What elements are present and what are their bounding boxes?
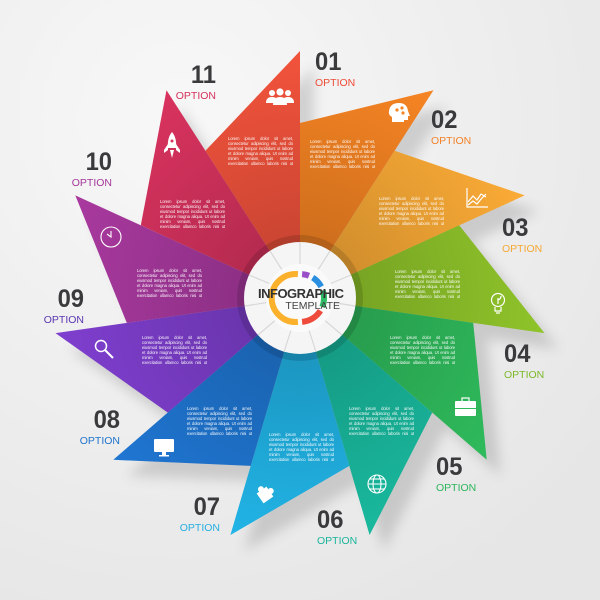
text 02: minim veniam, quis nostrud [310, 159, 375, 164]
label 05: 05 [436, 453, 462, 481]
label 02 [431, 106, 471, 147]
text 11: eiusmod tempor incididunt ut labore [160, 209, 225, 214]
text 07 [269, 432, 334, 462]
text 01: minim veniam, quis nostrud [228, 156, 293, 161]
text 05 [390, 335, 455, 365]
text 09: Lorem ipsum dolor sit amet, [142, 335, 207, 340]
icon: briefcase [455, 398, 476, 416]
text 04: consectetur adipiscing elit, sed do [395, 274, 460, 279]
text 05: eiusmod tempor incididunt ut labore [390, 345, 455, 350]
text 04: Lorem ipsum dolor sit amet, [395, 269, 460, 274]
text 07: consectetur adipiscing elit, sed do [269, 437, 334, 442]
blade 04 [300, 225, 544, 333]
text 01: eiusmod tempor incididunt ut labore [228, 146, 293, 151]
center title: TEMPLATE [285, 300, 340, 312]
text 09: exercitation ullamco laboris nisi ut [142, 360, 207, 365]
label 10: 10 [86, 148, 112, 176]
text 10: minim veniam, quis nostrud [137, 288, 202, 293]
text 05: et dolore magna aliqua. Ut enim ad [390, 350, 455, 355]
text 10: eiusmod tempor incididunt ut labore [137, 278, 202, 283]
text 08: eiusmod tempor incididunt ut labore [187, 416, 252, 421]
donut chart [272, 274, 324, 322]
blade 06 [300, 298, 432, 535]
icon: monitor [154, 439, 174, 456]
text 09: et dolore magna aliqua. Ut enim ad [142, 350, 207, 355]
label 08: 08 [94, 406, 120, 434]
label 07 [180, 493, 220, 534]
label 08 [80, 406, 120, 447]
icon: head [389, 103, 410, 122]
label 05 [436, 453, 476, 494]
label 05: OPTION [436, 482, 476, 494]
label 01: 01 [315, 48, 341, 76]
blade 07 [230, 298, 349, 535]
text 04: exercitation ullamco laboris nisi ut [395, 294, 460, 299]
icon: people [266, 88, 294, 105]
text 05: consectetur adipiscing elit, sed do [390, 340, 455, 345]
text 06: minim veniam, quis nostrud [349, 426, 414, 431]
text 07: minim veniam, quis nostrud [269, 452, 334, 457]
text 02: eiusmod tempor incididunt ut labore [310, 149, 375, 154]
text 08: consectetur adipiscing elit, sed do [187, 411, 252, 416]
label 06 [317, 506, 357, 547]
blade 05 [300, 298, 487, 460]
label 06: 06 [317, 506, 343, 534]
label 02: OPTION [431, 135, 471, 147]
label 06: OPTION [317, 535, 357, 547]
text 05: exercitation ullamco laboris nisi ut [390, 360, 455, 365]
label 11: 11 [191, 61, 216, 89]
text 09: eiusmod tempor incididunt ut labore [142, 345, 207, 350]
text 08: et dolore magna aliqua. Ut enim ad [187, 421, 252, 426]
text 11: minim veniam, quis nostrud [160, 219, 225, 224]
text 10 [137, 268, 202, 298]
text 03: eiusmod tempor incididunt ut labore [379, 206, 444, 211]
label 03 [502, 214, 542, 255]
text 04: minim veniam, quis nostrud [395, 289, 460, 294]
text 09: consectetur adipiscing elit, sed do [142, 340, 207, 345]
text 03: et dolore magna aliqua. Ut enim ad [379, 211, 444, 216]
icon: puzzle [254, 481, 277, 503]
text 09: minim veniam, quis nostrud [142, 355, 207, 360]
text 06: exercitation ullamco laboris nisi ut [349, 431, 414, 436]
blade 10 [75, 195, 300, 323]
text 08: exercitation ullamco laboris nisi ut [187, 431, 252, 436]
icon: magnifier [96, 340, 113, 358]
icon: clock [101, 227, 121, 247]
text 07: eiusmod tempor incididunt ut labore [269, 442, 334, 447]
text 04: eiusmod tempor incididunt ut labore [395, 279, 460, 284]
blade 08 [113, 298, 300, 466]
text 05: minim veniam, quis nostrud [390, 355, 455, 360]
text 08: minim veniam, quis nostrud [187, 426, 252, 431]
text 01: exercitation ullamco laboris nisi ut [228, 161, 293, 166]
label 11 [176, 61, 216, 102]
text 04 [395, 269, 460, 299]
label 09: OPTION [44, 314, 84, 326]
text 10: consectetur adipiscing elit, sed do [137, 273, 202, 278]
text 07: Lorem ipsum dolor sit amet, [269, 432, 334, 437]
label 09: 09 [58, 285, 84, 313]
text 10: exercitation ullamco laboris nisi ut [137, 293, 202, 298]
blade 03 [300, 151, 525, 298]
text 07: et dolore magna aliqua. Ut enim ad [269, 447, 334, 452]
blade 11 [141, 90, 300, 298]
icon: chart [467, 188, 488, 207]
center title [258, 286, 344, 312]
text 08 [187, 406, 252, 436]
text 06: et dolore magna aliqua. Ut enim ad [349, 421, 414, 426]
label 11: OPTION [176, 90, 216, 102]
label 07: OPTION [180, 522, 220, 534]
label 08: OPTION [80, 435, 120, 447]
text 03 [379, 196, 444, 226]
label 03: 03 [502, 214, 528, 242]
label 01: OPTION [315, 77, 355, 89]
icon: globe [368, 475, 386, 493]
text 11: consectetur adipiscing elit, sed do [160, 204, 225, 209]
text 02: consectetur adipiscing elit, sed do [310, 144, 375, 149]
label 01 [315, 48, 355, 89]
icon: bulb [492, 294, 504, 313]
label 04: 04 [504, 340, 530, 368]
center circle [237, 235, 363, 361]
text 11: et dolore magna aliqua. Ut enim ad [160, 214, 225, 219]
label 09 [44, 285, 84, 326]
label 04: OPTION [504, 369, 544, 381]
text 11: exercitation ullamco laboris nisi ut [160, 224, 225, 229]
text 08: Lorem ipsum dolor sit amet, [187, 406, 252, 411]
text 03: consectetur adipiscing elit, sed do [379, 201, 444, 206]
label 07: 07 [194, 493, 220, 521]
text 03: exercitation ullamco laboris nisi ut [379, 221, 444, 226]
label 02: 02 [431, 106, 457, 134]
text 06: eiusmod tempor incididunt ut labore [349, 416, 414, 421]
text 10: et dolore magna aliqua. Ut enim ad [137, 283, 202, 288]
text 01 [228, 136, 293, 166]
label 10: OPTION [72, 177, 112, 189]
icon: rocket [164, 132, 180, 158]
text 06: consectetur adipiscing elit, sed do [349, 411, 414, 416]
text 06 [349, 406, 414, 436]
text 02: Lorem ipsum dolor sit amet, [310, 139, 375, 144]
blade 02 [300, 90, 434, 298]
text 02: exercitation ullamco laboris nisi ut [310, 164, 375, 169]
icons [96, 88, 504, 503]
text 06: Lorem ipsum dolor sit amet, [349, 406, 414, 411]
text 11 [160, 199, 225, 229]
text 01: consectetur adipiscing elit, sed do [228, 141, 293, 146]
text 01: et dolore magna aliqua. Ut enim ad [228, 151, 293, 156]
label 10 [72, 148, 112, 189]
text 07: exercitation ullamco laboris nisi ut [269, 457, 334, 462]
blade 09 [56, 298, 300, 413]
shadows [70, 67, 558, 551]
text 05: Lorem ipsum dolor sit amet, [390, 335, 455, 340]
label 03: OPTION [502, 243, 542, 255]
text 10: Lorem ipsum dolor sit amet, [137, 268, 202, 273]
center title: INFOGRAPHIC [258, 286, 344, 301]
text 04: et dolore magna aliqua. Ut enim ad [395, 284, 460, 289]
label 04 [504, 340, 544, 381]
text 01: Lorem ipsum dolor sit amet, [228, 136, 293, 141]
text 09 [142, 335, 207, 365]
text 03: Lorem ipsum dolor sit amet, [379, 196, 444, 201]
text 02: et dolore magna aliqua. Ut enim ad [310, 154, 375, 159]
text 11: Lorem ipsum dolor sit amet, [160, 199, 225, 204]
text 03: minim veniam, quis nostrud [379, 216, 444, 221]
text 02 [310, 139, 375, 169]
blade 01 [205, 51, 300, 298]
